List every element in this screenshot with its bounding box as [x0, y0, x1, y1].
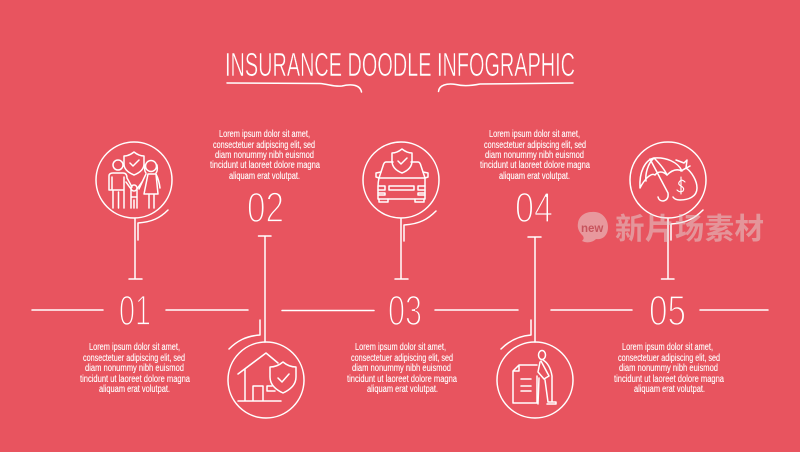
text block 03: consectetuer adipiscing elit, sed: [351, 353, 453, 364]
text block 02: aliquam erat volutpat.: [229, 171, 300, 182]
text block 05: [614, 342, 724, 395]
icon: umbrella and money bag: [630, 142, 706, 218]
text block 01: Lorem ipsum dolor sit amet,: [89, 342, 180, 353]
number 01: 01: [119, 287, 151, 335]
icon: person with document: [497, 342, 573, 418]
text block 02: [210, 129, 320, 182]
text block 01: consectetuer adipiscing elit, sed: [83, 353, 185, 364]
text block 04: aliquam erat volutpat.: [499, 171, 570, 182]
number 03: 03: [388, 287, 422, 335]
step 05: [614, 142, 724, 395]
text block 05: diam nonummy nibh euismod: [619, 363, 718, 374]
number 05: 05: [649, 287, 686, 335]
title: INSURANCE DOODLE INFOGRAPHIC: [225, 46, 575, 83]
timeline horizontal segments: [32, 309, 768, 312]
text block 03: tincidunt ut laoreet dolore magna: [347, 374, 457, 385]
text block 03: diam nonummy nibh euismod: [352, 363, 451, 374]
text block 03: [347, 342, 457, 395]
watermark badge text: new: [581, 223, 603, 235]
number 04: 04: [515, 184, 553, 232]
text block 02: diam nonummy nibh euismod: [215, 150, 314, 161]
text block 02: consectetuer adipiscing elit, sed: [213, 140, 315, 151]
step 04: [480, 129, 590, 418]
text block 04: consectetuer adipiscing elit, sed: [484, 140, 586, 151]
connector 02: [229, 236, 271, 349]
connector 03: [395, 211, 436, 279]
text block 01: diam nonummy nibh euismod: [85, 363, 184, 374]
text block 05: tincidunt ut laoreet dolore magna: [614, 374, 724, 385]
watermark badge: [578, 212, 608, 242]
text block 04: diam nonummy nibh euismod: [485, 150, 584, 161]
watermark text: 新片场素材: [615, 213, 764, 246]
connector 05: [662, 210, 703, 279]
step 01: [80, 142, 190, 395]
text block 05: Lorem ipsum dolor sit amet,: [622, 342, 713, 353]
text block 02: Lorem ipsum dolor sit amet,: [219, 129, 310, 140]
text block 04: Lorem ipsum dolor sit amet,: [489, 129, 580, 140]
text block 04: [480, 129, 590, 182]
text block 05: consectetuer adipiscing elit, sed: [618, 353, 720, 364]
step 02: [210, 129, 320, 418]
text block 01: tincidunt ut laoreet dolore magna: [80, 374, 190, 385]
text block 04: tincidunt ut laoreet dolore magna: [480, 160, 590, 171]
number 02: 02: [247, 184, 284, 232]
icon: family with shield: [96, 142, 172, 218]
step 03: [347, 142, 457, 395]
connector 01: [129, 210, 168, 279]
text block 01: aliquam erat volutpat.: [99, 384, 170, 395]
connector 04: [501, 237, 541, 349]
text block 05: aliquam erat volutpat.: [634, 384, 705, 395]
text block 02: tincidunt ut laoreet dolore magna: [210, 160, 320, 171]
icon: car with shield: [363, 142, 439, 218]
watermark: [578, 212, 764, 246]
title underline flourish: [227, 83, 573, 92]
text block 03: Lorem ipsum dolor sit amet,: [355, 342, 446, 353]
text block 01: [80, 342, 190, 395]
text block 03: aliquam erat volutpat.: [367, 384, 438, 395]
icon: house with shield: [228, 342, 304, 418]
